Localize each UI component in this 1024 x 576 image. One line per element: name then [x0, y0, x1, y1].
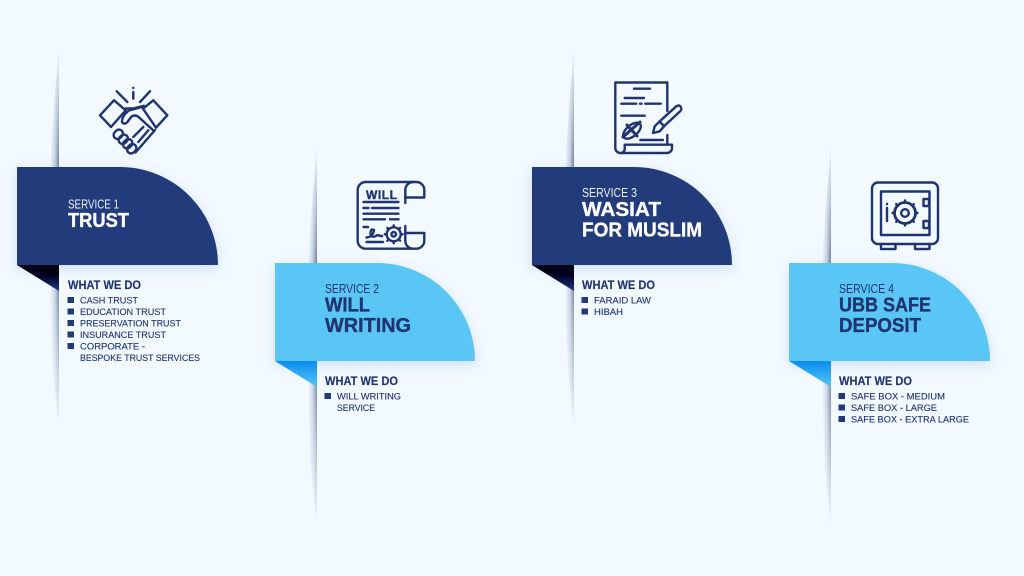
label: service 2: SERVICE 2: [325, 282, 379, 296]
icon: will scroll: [358, 182, 424, 249]
icon: will scroll: WILL: [366, 188, 397, 202]
heading: ubb safe deposit: DEPOSIT: [839, 315, 921, 337]
panel: service 4: [789, 143, 990, 528]
column shadow: service 4: [823, 150, 831, 520]
banner: service 4: [789, 263, 990, 361]
list: what we do, service 4: SAFE BOX - EXTRA LARGE: [851, 414, 969, 426]
list: what we do, service 3: FARAID LAW: [594, 296, 651, 306]
icon: safe: [872, 182, 938, 249]
label: service 1: SERVICE 1: [68, 198, 119, 212]
list: what we do, service 2: WILL WRITING: [337, 392, 401, 402]
column shadow: service 1: [51, 52, 59, 420]
banner: service 1: [17, 167, 218, 265]
heading: ubb safe deposit: UBB SAFE: [839, 294, 931, 316]
heading: wasiat for muslim: WASIAT: [582, 199, 661, 221]
list: what we do, service 1: WHAT WE DO: [68, 280, 141, 292]
fold: service 3: [532, 265, 574, 291]
column shadow: service 3: [566, 52, 574, 420]
icon: handshake: [100, 88, 167, 155]
list: what we do, service 3: [582, 280, 655, 318]
heading: trust: TRUST: [68, 210, 129, 232]
list: what we do, service 1: CASH TRUST: [80, 296, 138, 306]
panel: service 3: [532, 45, 732, 430]
list: what we do, service 2: WHAT WE DO: [325, 376, 398, 388]
panel: service 2: [275, 143, 475, 528]
fold: service 4: [789, 361, 831, 387]
heading: ubb safe deposit: [839, 294, 931, 337]
heading: wasiat for muslim: [582, 199, 702, 242]
list: what we do, service 4: SAFE BOX - MEDIUM: [851, 392, 945, 402]
banner: service 2: [275, 263, 475, 361]
list: what we do, service 1: EDUCATION TRUST: [80, 307, 166, 318]
list: what we do, service 1: CORPORATE -: [80, 342, 145, 352]
list: what we do, service 2: SERVICE: [337, 403, 375, 414]
fold: service 2: [275, 361, 317, 387]
icon: document and pen: [615, 82, 681, 153]
banner: service 3: [532, 167, 732, 265]
list: what we do, service 1: [68, 280, 200, 364]
fold: service 1: [17, 265, 59, 291]
heading: will writing: [325, 294, 411, 337]
heading: wasiat for muslim: FOR MUSLIM: [582, 220, 702, 242]
label: service 4: SERVICE 4: [839, 282, 894, 296]
list: what we do, service 4: SAFE BOX - LARGE: [851, 403, 937, 414]
list: what we do, service 4: WHAT WE DO: [839, 376, 912, 388]
panel: service 1: [17, 45, 218, 430]
label: service 3: SERVICE 3: [582, 186, 637, 200]
column shadow: service 2: [309, 150, 317, 520]
heading: will writing: WILL: [325, 294, 370, 316]
heading: will writing: WRITING: [325, 315, 411, 337]
list: what we do, service 1: PRESERVATION TRUST: [80, 318, 181, 330]
list: what we do, service 1: INSURANCE TRUST: [80, 330, 166, 341]
list: what we do, service 3: HIBAH: [594, 307, 623, 318]
list: what we do, service 4: [838, 376, 969, 426]
list: what we do, service 2: [324, 376, 401, 414]
list: what we do, service 1: BESPOKE TRUST SERVICES: [80, 353, 200, 364]
list: what we do, service 3: WHAT WE DO: [582, 280, 655, 292]
